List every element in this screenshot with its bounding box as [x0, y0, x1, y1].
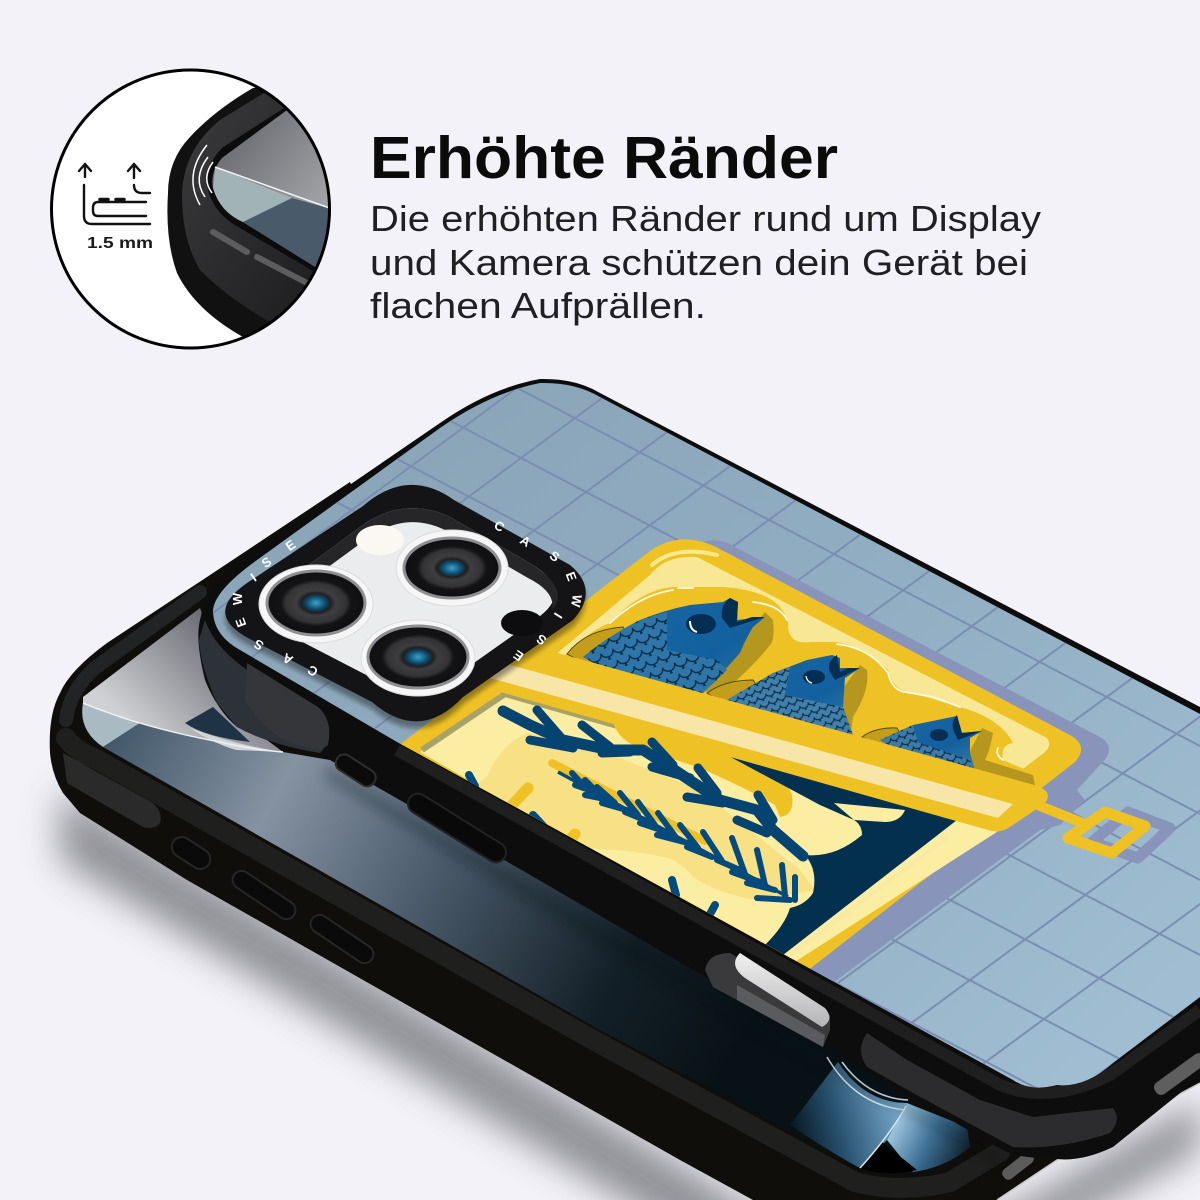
corner dark display — [243, 198, 335, 272]
fish two scale fill — [727, 667, 853, 735]
raised edge icon — [79, 164, 150, 224]
wallpaper light lines — [827, 1057, 908, 1168]
icon measurement label: 1.5 mm — [87, 235, 153, 252]
lens three — [361, 620, 475, 696]
tin yellow base — [380, 539, 1081, 1000]
tin shadow — [704, 540, 1109, 982]
carbon corner patch — [63, 753, 161, 828]
small seaweed bits — [469, 775, 715, 916]
fish three body — [880, 716, 982, 770]
right inner rim light — [788, 837, 948, 957]
lens one glass — [267, 571, 365, 635]
flash — [356, 525, 404, 555]
CASEWISE ring lettering: I — [551, 610, 566, 621]
description text: Die erhöhten Ränder rund um Display — [370, 198, 1041, 239]
highlight lines on oil — [610, 588, 1003, 760]
CASEWISE ring lettering — [230, 517, 585, 680]
shadow under phones — [60, 790, 1200, 1200]
CASEWISE ring lettering: S — [251, 636, 266, 654]
lens two glass — [404, 538, 500, 598]
fish one — [566, 598, 765, 694]
CASEWISE ring lettering: A — [517, 532, 534, 550]
yellow reflection under band — [613, 722, 792, 817]
fish one scale fill — [583, 612, 727, 693]
wallpaper blue glow — [790, 1062, 907, 1168]
camera lip — [134, 185, 150, 193]
glass sheet — [83, 608, 283, 752]
lens three surround — [361, 620, 475, 696]
device outline — [93, 202, 146, 216]
oil chamber — [555, 557, 1049, 775]
key lid stripe — [490, 662, 1013, 818]
CASEWISE ring lettering: C — [491, 517, 508, 535]
pull tab arm — [1030, 802, 1090, 826]
yellow seabed stubs — [513, 788, 575, 842]
lens two — [396, 530, 508, 606]
silent button — [168, 833, 214, 873]
wallpaper right glow — [887, 1103, 970, 1172]
CASEWISE ring lettering: E — [232, 616, 249, 629]
CASEWISE ring lettering: W — [230, 592, 245, 605]
fish two tail — [706, 680, 756, 700]
charging port — [735, 953, 829, 1027]
charging opening bevel — [705, 953, 830, 1047]
CASEWISE ring lettering: A — [279, 650, 296, 668]
fish two scales — [727, 667, 853, 735]
bumper carbon patch — [245, 663, 329, 749]
fish three — [862, 715, 982, 770]
right arrow — [128, 164, 140, 178]
impact arcs — [193, 145, 213, 205]
wheat upper leaves — [572, 773, 795, 900]
CASEWISE ring lettering: W — [568, 593, 585, 609]
corner highlights — [213, 232, 307, 283]
CASEWISE ring lettering: I — [248, 570, 259, 584]
pale glass corner — [82, 703, 140, 747]
inset phone corner — [167, 80, 340, 340]
inset circle border — [52, 70, 330, 348]
CASEWISE ring lettering: S — [533, 631, 549, 648]
charging port lower lip — [737, 985, 825, 1047]
lens two surround — [396, 530, 508, 606]
inset circle: raised edge detail — [52, 70, 340, 348]
fish three scales — [880, 725, 975, 770]
camera module — [225, 485, 586, 728]
CASEWISE ring lettering: C — [304, 662, 321, 680]
lens one — [259, 565, 373, 643]
main seaweed — [503, 710, 803, 856]
wheat stalk yellow — [552, 763, 705, 841]
back phone body — [50, 482, 1200, 1200]
navy water — [723, 753, 957, 955]
wallpaper black triangle — [860, 1142, 917, 1174]
pull tab shadow — [1092, 812, 1170, 858]
inset white disc — [52, 70, 330, 348]
fish one body — [583, 598, 765, 694]
wheat stalk — [558, 772, 788, 897]
blue artwork panel — [213, 383, 1200, 1088]
pale glass wedge — [190, 728, 283, 752]
grid lines — [213, 388, 1200, 1088]
panel background — [200, 370, 1200, 1100]
CASEWISE ring lettering: S — [547, 548, 563, 565]
panel shadow line — [420, 692, 616, 752]
description text — [370, 198, 1041, 326]
lens three glass — [368, 626, 468, 688]
device lenses — [100, 198, 124, 201]
fish one eye glint — [690, 621, 697, 632]
front glass white line — [83, 703, 283, 752]
fish two mouth — [829, 655, 860, 680]
tin top highlight — [652, 552, 717, 565]
CASEWISE ring lettering: E — [563, 570, 580, 583]
side button — [404, 790, 510, 866]
bottom carbon corner — [861, 1033, 1117, 1147]
back phone inner rim — [66, 738, 1000, 1188]
corner inner rim — [208, 90, 335, 274]
fish three mouth — [953, 715, 982, 740]
back phone port — [1000, 1150, 1036, 1182]
fish three tail — [862, 728, 905, 745]
fish three eye — [930, 729, 948, 741]
left arrow — [79, 164, 91, 177]
case body — [198, 379, 1200, 1159]
lower light panel — [420, 693, 1000, 965]
silver edge sliver — [997, 1083, 1200, 1200]
description text: flachen Aufprällen. — [370, 285, 706, 326]
CASEWISE ring lettering: E — [283, 536, 299, 554]
pull tab ring — [1068, 812, 1145, 853]
wheat lower leaves — [575, 785, 790, 900]
fish two eye glint — [806, 676, 812, 683]
mute switch — [333, 751, 379, 790]
back phone showing the display — [50, 482, 1200, 1200]
fish one eye — [686, 614, 716, 634]
dark wallpaper tab — [185, 707, 250, 742]
fish three scale fill — [880, 725, 975, 770]
corner translucent band — [182, 80, 335, 325]
case inner edge light — [397, 750, 1200, 1093]
corner pale glass — [213, 167, 292, 222]
volume up button — [229, 867, 299, 923]
fish one mouth — [722, 598, 765, 628]
fish two body — [727, 655, 860, 735]
pale seabed blob — [470, 733, 815, 900]
fish two — [707, 655, 860, 735]
corner white glass line — [215, 167, 335, 210]
fish two eye — [803, 670, 825, 684]
heading: Erhöhte Ränder — [370, 125, 838, 191]
volume down button — [307, 911, 377, 967]
display — [103, 723, 970, 1174]
camera ring shadow — [225, 492, 586, 728]
pale cut-out in water — [834, 803, 905, 822]
key lid band — [490, 637, 1048, 831]
oil blob around fish — [565, 587, 1024, 771]
sardine tin artwork — [380, 539, 1170, 1000]
outer lip — [84, 185, 150, 224]
corner outer case — [167, 80, 340, 340]
shadow of front phone on display — [326, 765, 1010, 1170]
corner glass — [212, 110, 335, 270]
back phone upper rim — [66, 592, 200, 720]
CASEWISE ring lettering: S — [259, 553, 275, 571]
inner ring wall — [284, 508, 558, 610]
camera glass — [264, 508, 555, 690]
lidar sensor — [501, 610, 543, 636]
main stalk — [503, 711, 803, 856]
CASEWISE ring lettering: E — [510, 647, 526, 664]
lens one surround — [259, 565, 373, 643]
side branches — [530, 710, 773, 833]
camera ring — [225, 485, 586, 721]
front phone showing the case back — [198, 379, 1200, 1160]
description text: und Kamera schützen dein Gerät bei — [370, 242, 1028, 283]
fish one tail — [566, 626, 624, 663]
fish one scales — [588, 617, 724, 693]
fish shadows — [700, 612, 1036, 790]
bottom speaker — [1152, 1051, 1200, 1097]
translucent bumper corner — [199, 620, 327, 753]
